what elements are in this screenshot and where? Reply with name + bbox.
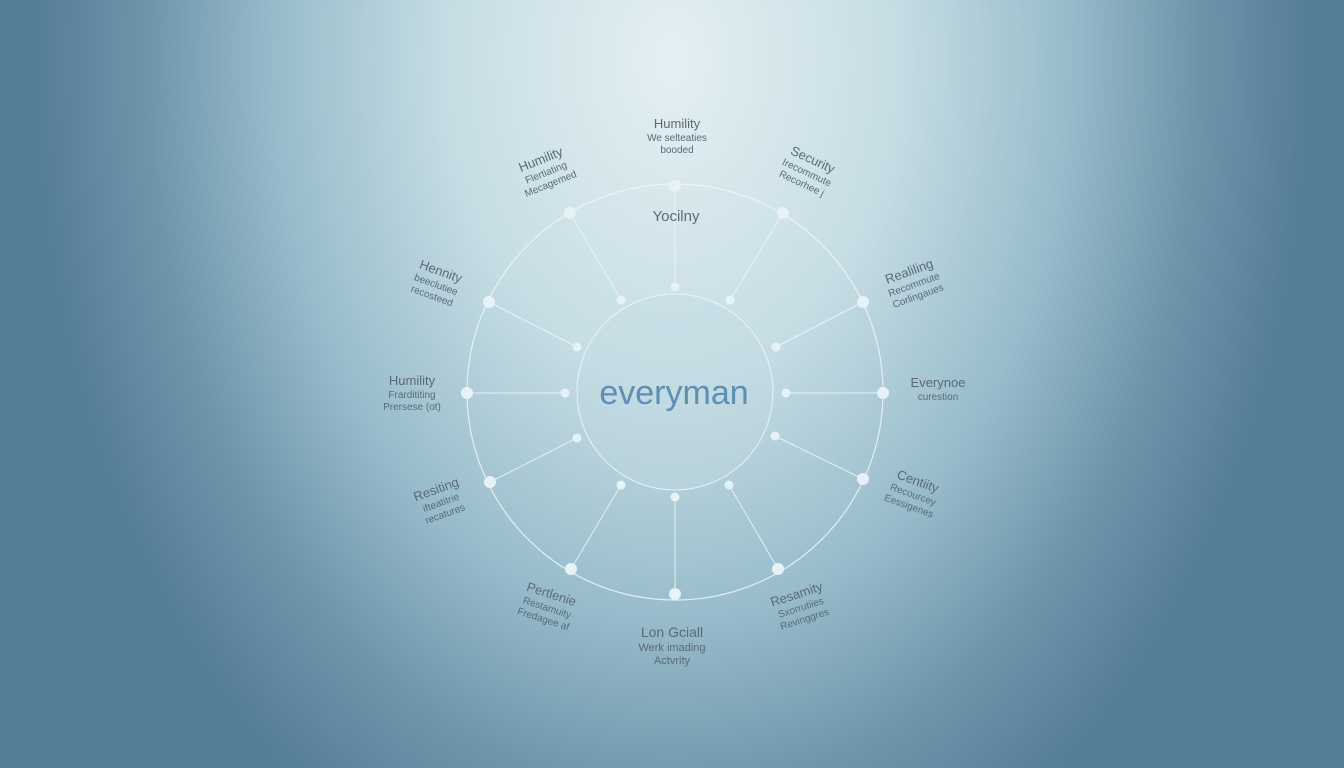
label: bottom-right: Revinggres [779,607,831,633]
label: bottom: Lon Gciall [641,624,703,640]
center title: everyman [599,374,749,412]
label: upper-right [881,255,946,311]
label: lower-left: ifteatitrie [422,492,461,515]
label: top-left: Flertiating [524,160,569,187]
label: upper-left: recosteed [409,284,454,309]
label: top-right: Irecommute [780,157,833,189]
label: left: Frardititing [388,390,436,401]
label: bottom-right: Sxorrutiies [777,596,825,621]
label: top: Humility [654,116,701,131]
label: right [911,375,965,403]
label: bottom-left [516,579,580,633]
label: top-right: Recorhee j [777,169,826,199]
label: top-left: Mecagemed [523,169,578,200]
label: right: curestion [918,392,958,403]
label: upper-left [408,256,465,310]
label: lower-left: recatures [424,502,467,527]
label: top-right [775,142,840,200]
label: lower-left: Resiting [411,474,461,504]
inner circle [577,294,773,490]
label: top: We selteaties [647,133,707,144]
label: bottom-right [768,578,833,633]
label: lower-left [411,474,469,528]
label: lower-right [883,465,945,521]
label: top-left [512,142,578,200]
label: left [383,373,441,413]
outer ring [467,184,883,600]
label: bottom [638,624,706,667]
label: bottom-right: Resamity [768,578,825,610]
label: left: Prersese (ot) [383,402,441,413]
label: top-left: Humility [516,144,565,175]
label: lower-right: Recourcey [888,482,937,509]
label: top-right: Security [788,143,838,177]
label: top: booded [660,145,694,156]
label: bottom: Actvrity [654,655,691,667]
inner label: Yocilny [653,208,700,225]
spokes [467,186,883,594]
nodes [461,180,889,600]
label: left: Humility [389,373,436,388]
label: lower-right: Eessigenes [883,493,935,521]
label: bottom-left: Pertlenie [525,579,578,609]
label: upper-right: Realiling [883,256,935,287]
label: upper-left: Hennity [418,257,465,286]
label: upper-left: beeclutiee [412,272,460,298]
label: bottom: Werk imading [638,642,706,654]
label: bottom-left: Restamuity [521,595,572,621]
label: upper-right: Recommute [887,271,942,300]
label: bottom-left: Fredagee af [516,606,571,633]
label: top [647,116,707,156]
label: lower-right: Centiity [895,467,941,496]
label: right: Everynoe [911,375,965,390]
label: upper-right: Corlingaues [891,282,945,311]
